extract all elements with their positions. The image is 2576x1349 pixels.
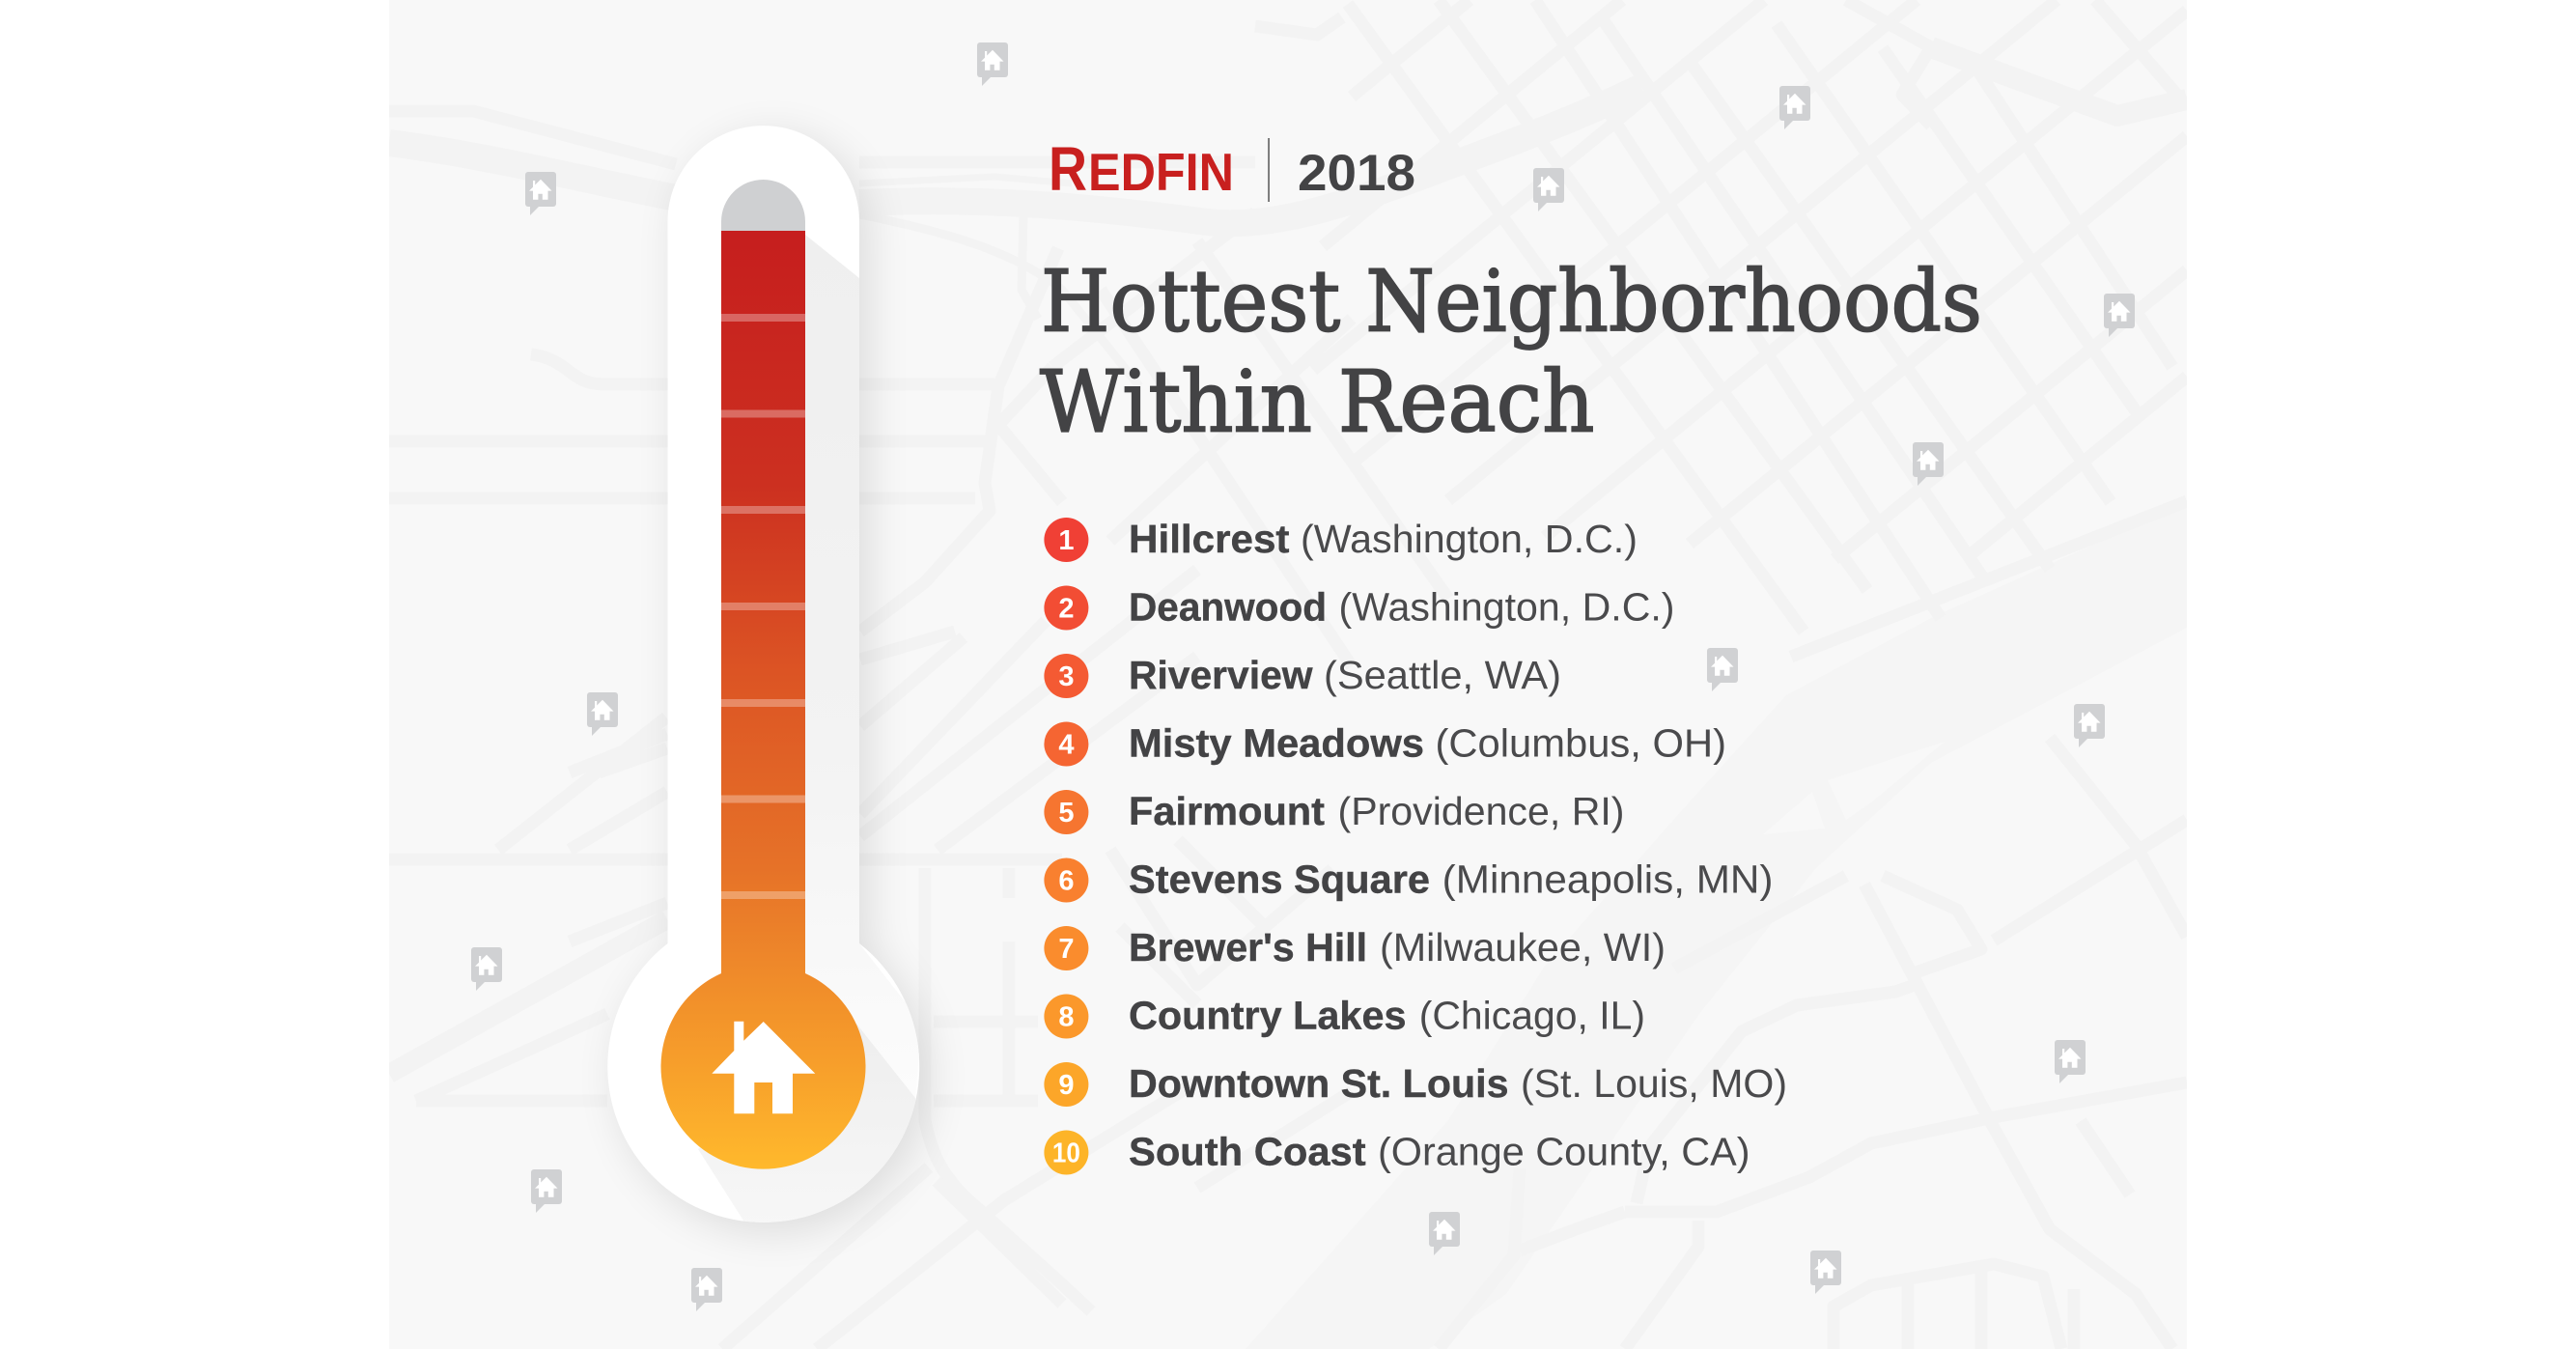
item 9	[1044, 1061, 1787, 1107]
logo: Redfin: EDFIN	[1088, 142, 1234, 202]
item 3: Riverview	[1129, 653, 1313, 697]
item 6: 6	[1058, 865, 1074, 896]
item 8	[1044, 993, 1645, 1039]
item 6: Stevens Square	[1129, 857, 1430, 902]
item 6: (Minneapolis, MN)	[1442, 857, 1773, 902]
item 6	[1044, 857, 1773, 902]
item 10: 10	[1052, 1138, 1080, 1168]
item 10	[1044, 1130, 1750, 1174]
item 1	[1044, 517, 1638, 562]
item 2: 2	[1058, 593, 1074, 624]
item 8: (Chicago, IL)	[1419, 993, 1645, 1037]
title: Hottest Neighborhoods	[1041, 252, 1982, 351]
item 10: South Coast	[1129, 1130, 1366, 1174]
year: 2018	[1298, 145, 1415, 202]
logo: Redfin	[1049, 134, 1234, 204]
title	[1040, 252, 1982, 452]
thermometer mercury fill	[660, 231, 865, 1169]
item 9: Downtown St. Louis	[1129, 1061, 1508, 1106]
item 8: Country Lakes	[1129, 993, 1406, 1037]
thermometer empty cap	[721, 180, 805, 232]
icon: house	[712, 1022, 815, 1113]
ranked list	[1044, 517, 1787, 1174]
item 4: 4	[1058, 730, 1074, 761]
item 2: (Washington, D.C.)	[1338, 585, 1674, 630]
item 1: 1	[1058, 525, 1074, 556]
item 5: Fairmount	[1129, 789, 1325, 833]
item 1: (Washington, D.C.)	[1301, 517, 1638, 561]
item 8: 8	[1058, 1002, 1074, 1033]
panel: background	[389, 0, 2187, 1349]
item 9: (St. Louis, MO)	[1521, 1061, 1787, 1106]
logo: Redfin: R	[1049, 134, 1087, 204]
item 4: Misty Meadows	[1129, 720, 1424, 765]
divider	[1268, 138, 1270, 202]
title: Within Reach	[1040, 352, 1595, 452]
item 2	[1044, 585, 1674, 630]
item 10: (Orange County, CA)	[1378, 1130, 1750, 1174]
item 3	[1044, 653, 1561, 698]
item 9: 9	[1058, 1070, 1074, 1101]
item 7: 7	[1058, 934, 1074, 965]
item 7: (Milwaukee, WI)	[1380, 925, 1666, 970]
item 5: (Providence, RI)	[1338, 789, 1624, 833]
item 1: Hillcrest	[1129, 517, 1290, 561]
item 7	[1044, 925, 1666, 970]
item 5: 5	[1058, 798, 1074, 829]
background street map	[389, 0, 2187, 1349]
thermometer tick marks	[721, 314, 805, 899]
thermometer	[607, 126, 929, 1232]
item 5	[1044, 789, 1624, 834]
item 2: Deanwood	[1129, 585, 1327, 630]
map pins	[471, 42, 2135, 1311]
item 3: 3	[1058, 661, 1074, 692]
item 7: Brewer's Hill	[1129, 925, 1367, 970]
item 4: (Columbus, OH)	[1435, 720, 1726, 765]
item 4	[1044, 720, 1726, 767]
item 3: (Seattle, WA)	[1324, 653, 1561, 697]
